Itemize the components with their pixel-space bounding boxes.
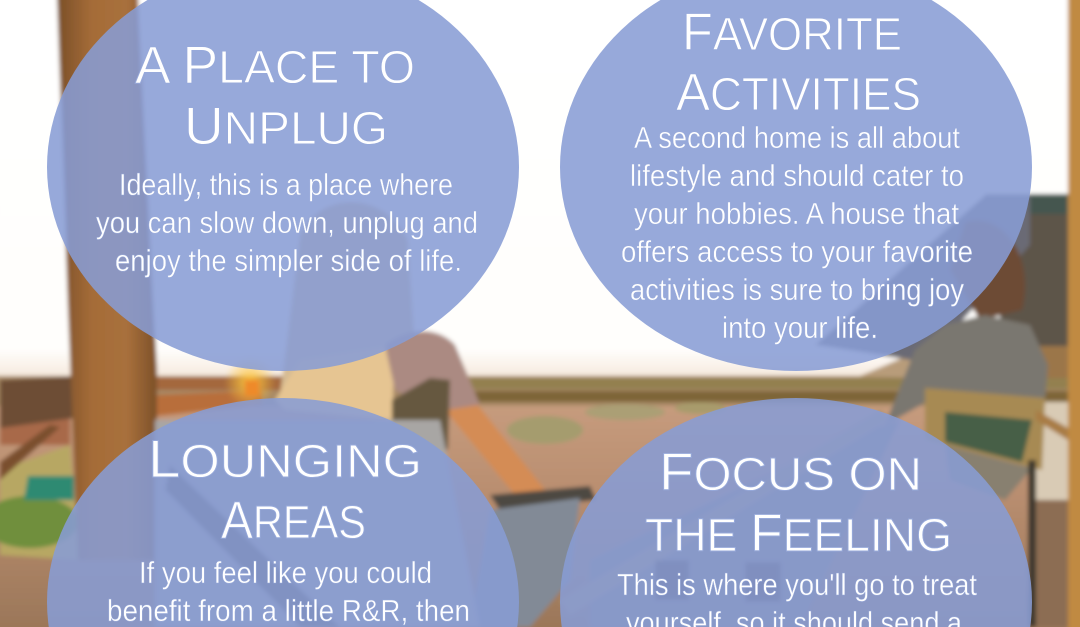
text block: unplug description xyxy=(96,167,478,278)
woman xyxy=(280,202,415,400)
heading: favorite activities: ACTIVITIES xyxy=(676,63,921,122)
text block: activities description xyxy=(621,120,973,345)
man xyxy=(950,220,1025,320)
text block: activities description: offers access to your favorite xyxy=(621,234,973,269)
heading: lounging areas xyxy=(148,430,422,550)
heading: a place to unplug: UNPLUG xyxy=(184,97,388,156)
heading: focus on the feeling xyxy=(645,443,952,563)
text block: activities description: lifestyle and should cater to xyxy=(630,158,964,193)
text block: lounging description: If you feel like you could xyxy=(139,555,432,590)
right edge post xyxy=(1068,0,1080,627)
heading: focus on the feeling: FOCUS ON xyxy=(659,443,922,502)
left post xyxy=(57,0,157,560)
text block: activities description: activities is sure to bring joy xyxy=(630,272,964,307)
text block: activities description: your hobbies. A house that xyxy=(634,196,959,231)
heading: a place to unplug xyxy=(135,36,415,156)
text block: activities description: A second home is all about xyxy=(634,120,960,155)
text block: activities description: into your life. xyxy=(722,310,878,345)
heading: lounging areas: LOUNGING xyxy=(148,430,422,489)
heading: a place to unplug: A PLACE TO xyxy=(135,36,415,95)
heading: favorite activities xyxy=(676,3,921,122)
scrub xyxy=(507,416,583,444)
heading: focus on the feeling: THE FEELING xyxy=(645,504,952,563)
text block: unplug description: you can slow down, unplug and xyxy=(96,205,478,240)
cabin at right xyxy=(985,194,1070,216)
text block: feeling description xyxy=(617,567,977,627)
heading: favorite activities: FAVORITE xyxy=(682,3,902,62)
text block: unplug description: Ideally, this is a place where xyxy=(119,167,453,202)
text block: lounging description: benefit from a little R&R, then xyxy=(107,593,470,627)
text block: feeling description: This is where you'll go to treat xyxy=(617,567,977,602)
heading: lounging areas: AREAS xyxy=(221,491,366,550)
panel: focus on the feeling xyxy=(560,398,1032,627)
left yard: grass, mat and bush xyxy=(0,445,80,560)
text block: unplug description: enjoy the simpler side of life. xyxy=(115,243,462,278)
railings xyxy=(157,377,282,390)
dark slanted roof behind top right ellipse xyxy=(815,195,1030,362)
panel: a place to unplug xyxy=(47,0,519,371)
panel: favorite activities xyxy=(560,0,1032,371)
panel: lounging areas xyxy=(47,398,519,627)
table and glasses xyxy=(590,420,900,627)
text block: lounging description xyxy=(107,555,470,627)
